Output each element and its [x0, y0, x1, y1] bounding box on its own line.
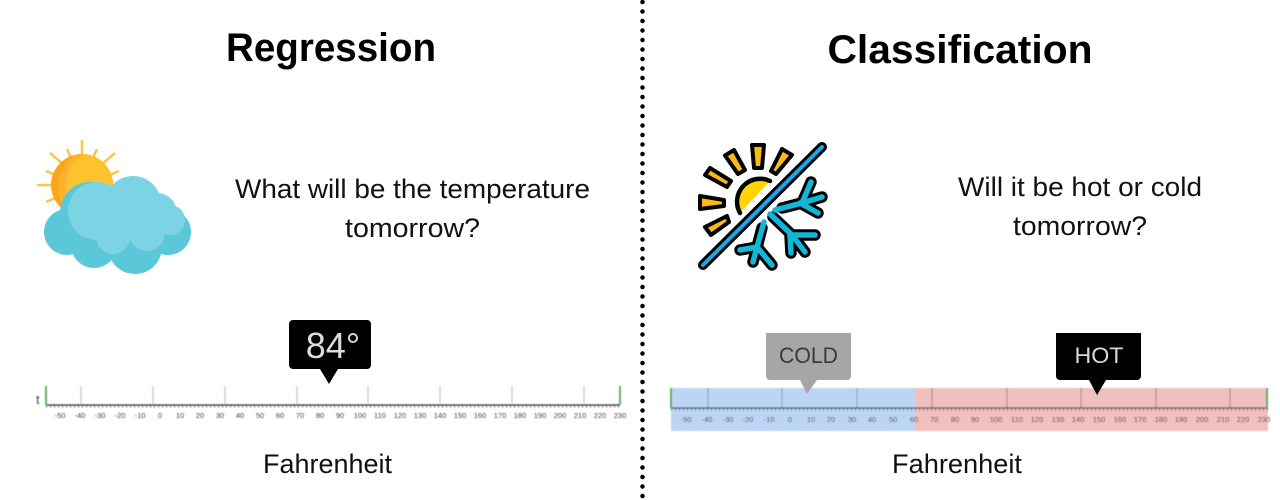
fahrenheit scale: 30 — [216, 411, 224, 420]
fahrenheit scale: 190 — [534, 411, 546, 420]
icon: sun and snowflake split — [700, 145, 822, 265]
fahrenheit scale with cold and hot zones: 20 — [827, 415, 835, 424]
fahrenheit scale with cold and hot zones: 150 — [1093, 415, 1105, 424]
panel: classification — [671, 28, 1270, 479]
question text: Will it be hot or cold — [958, 172, 1202, 202]
fahrenheit scale with cold and hot zones: -10 — [764, 415, 774, 424]
fahrenheit scale: -10 — [135, 411, 145, 420]
fahrenheit scale with cold and hot zones: 130 — [1052, 415, 1064, 424]
fahrenheit scale: t — [36, 392, 40, 407]
fahrenheit scale with cold and hot zones: 10 — [807, 415, 815, 424]
icon: sun behind cloud — [37, 140, 191, 274]
fahrenheit scale: 170 — [494, 411, 506, 420]
fahrenheit scale with cold and hot zones: 200 — [1196, 415, 1208, 424]
fahrenheit scale: 90 — [336, 411, 344, 420]
fahrenheit scale: -30 — [95, 411, 105, 420]
dotted divider — [640, 2, 645, 498]
fahrenheit scale: 220 — [594, 411, 606, 420]
callout: 84 degrees — [289, 320, 371, 384]
fahrenheit scale with cold and hot zones: 40 — [868, 415, 876, 424]
fahrenheit scale with cold and hot zones: 100 — [990, 415, 1002, 424]
fahrenheit scale with cold and hot zones: 210 — [1217, 415, 1229, 424]
callout: 84 degrees: 84° — [306, 325, 360, 366]
fahrenheit scale: 120 — [394, 411, 406, 420]
question text: tomorrow? — [1013, 211, 1147, 241]
fahrenheit scale with cold and hot zones: 180 — [1155, 415, 1167, 424]
fahrenheit scale: 40 — [236, 411, 244, 420]
axis label: Fahrenheit: Fahrenheit — [892, 449, 1022, 479]
axis label: Fahrenheit: Fahrenheit — [263, 449, 392, 479]
fahrenheit scale with cold and hot zones: 0 — [788, 415, 792, 424]
fahrenheit scale: 230 — [614, 411, 626, 420]
fahrenheit scale: -40 — [75, 411, 85, 420]
fahrenheit scale with cold and hot zones: 80 — [951, 415, 959, 424]
cold zone — [671, 388, 915, 431]
fahrenheit scale: 70 — [296, 411, 304, 420]
fahrenheit scale with cold and hot zones: 50 — [889, 415, 897, 424]
fahrenheit scale with cold and hot zones: -20 — [743, 415, 753, 424]
fahrenheit scale with cold and hot zones: 90 — [971, 415, 979, 424]
fahrenheit scale with cold and hot zones: 220 — [1237, 415, 1249, 424]
fahrenheit scale: 160 — [474, 411, 486, 420]
heading: Regression: Regression — [226, 26, 436, 70]
question text: tomorrow? — [345, 213, 480, 243]
fahrenheit scale with cold and hot zones: 170 — [1134, 415, 1146, 424]
fahrenheit scale with cold and hot zones: -30 — [723, 415, 733, 424]
fahrenheit scale with cold and hot zones: 60 — [910, 415, 918, 424]
fahrenheit scale with cold and hot zones: -50 — [681, 415, 691, 424]
fahrenheit scale: 60 — [276, 411, 284, 420]
callout: COLD: COLD — [779, 343, 838, 368]
fahrenheit scale: -20 — [115, 411, 125, 420]
fahrenheit scale with cold and hot zones: 140 — [1072, 415, 1084, 424]
fahrenheit scale: 10 — [176, 411, 184, 420]
question text: What will be the temperature — [235, 174, 590, 204]
heading: Classification: Classification — [828, 28, 1092, 72]
fahrenheit scale with cold and hot zones: 190 — [1175, 415, 1187, 424]
fahrenheit scale — [36, 386, 626, 420]
fahrenheit scale with cold and hot zones: 110 — [1011, 415, 1023, 424]
fahrenheit scale: 180 — [514, 411, 526, 420]
fahrenheit scale with cold and hot zones: -40 — [702, 415, 712, 424]
fahrenheit scale: 200 — [554, 411, 566, 420]
callout: COLD — [766, 333, 851, 394]
fahrenheit scale: 210 — [574, 411, 586, 420]
fahrenheit scale: 50 — [256, 411, 264, 420]
hot zone — [915, 388, 1268, 431]
callout: HOT: HOT — [1074, 343, 1124, 368]
fahrenheit scale with cold and hot zones — [671, 388, 1270, 431]
fahrenheit scale: 80 — [316, 411, 324, 420]
fahrenheit scale with cold and hot zones: 230 — [1258, 415, 1270, 424]
fahrenheit scale: 140 — [434, 411, 446, 420]
panel: regression — [36, 26, 626, 479]
fahrenheit scale: 150 — [454, 411, 466, 420]
fahrenheit scale: 130 — [414, 411, 426, 420]
fahrenheit scale: -50 — [55, 411, 65, 420]
fahrenheit scale: 20 — [196, 411, 204, 420]
fahrenheit scale: 100 — [354, 411, 366, 420]
fahrenheit scale: 110 — [374, 411, 386, 420]
fahrenheit scale with cold and hot zones: 120 — [1031, 415, 1043, 424]
fahrenheit scale: 0 — [158, 411, 162, 420]
fahrenheit scale with cold and hot zones: 30 — [848, 415, 856, 424]
fahrenheit scale with cold and hot zones: 70 — [930, 415, 938, 424]
callout: HOT — [1056, 333, 1141, 395]
fahrenheit scale with cold and hot zones: 160 — [1114, 415, 1126, 424]
